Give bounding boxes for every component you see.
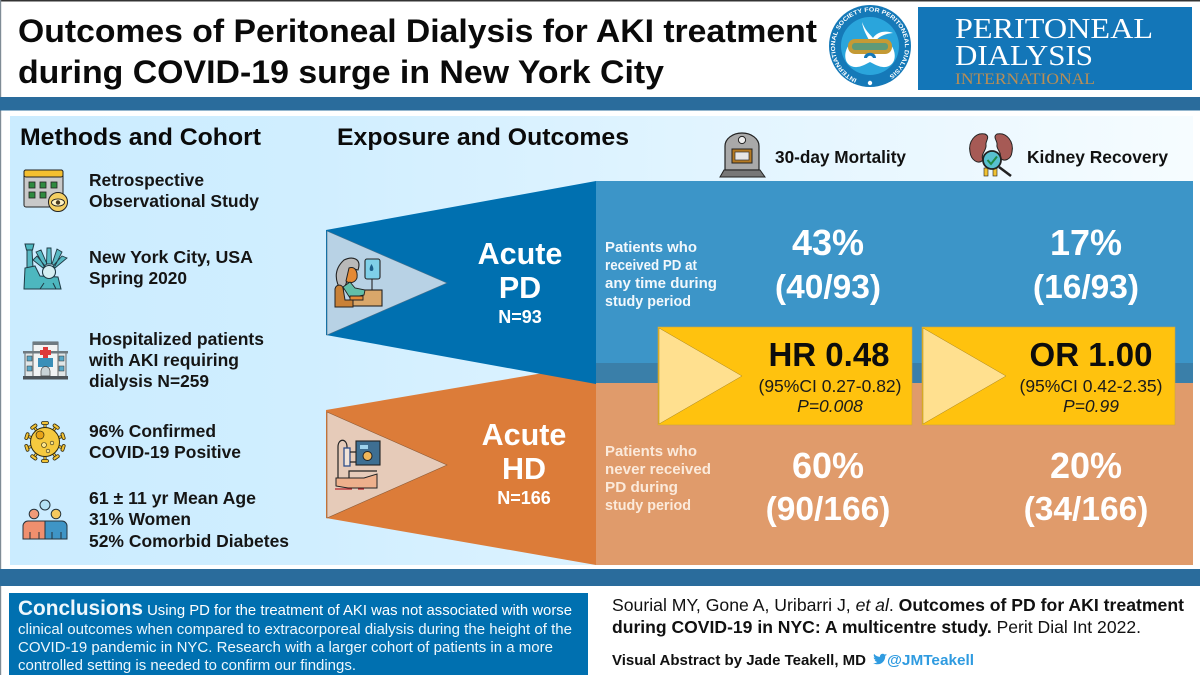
callout: hazard ratio: HR 0.48 [768, 336, 890, 373]
text: demographics: 31% Women [89, 509, 191, 529]
stat: PD mortality: 43% [792, 222, 864, 263]
text: covid status: COVID-19 Positive [89, 442, 241, 462]
callout: hazard ratio: (95%CI 0.27-0.82) [758, 376, 902, 396]
text: study design [89, 170, 259, 211]
text: acute HD label: N=166 [497, 488, 551, 508]
text: PD group definition: Patients who [605, 239, 697, 256]
credit: visual abstract author [612, 652, 974, 669]
text: acute PD label: PD [499, 271, 541, 305]
callout: hazard ratio: P=0.008 [797, 396, 863, 416]
text: location and dates: New York City, USA [89, 247, 253, 267]
stat: PD mortality [775, 222, 881, 306]
panel: methods and cohort [20, 124, 289, 551]
logo: Peritoneal Dialysis International journal [918, 7, 1192, 90]
icon: coronavirus [24, 422, 66, 462]
stat: PD kidney recovery: (16/93) [1033, 269, 1139, 306]
triangle: acute PD [327, 231, 447, 335]
text: acute PD label: N=93 [498, 307, 542, 327]
text: HD group definition [605, 443, 711, 514]
acute PD arm [327, 222, 1139, 335]
text: location and dates: Spring 2020 [89, 268, 187, 288]
icon: people group [23, 500, 67, 539]
triangle: acute HD [327, 412, 447, 518]
text: covid status [89, 421, 241, 462]
stat: HD kidney recovery [1024, 445, 1148, 528]
label: 30-day mortality: 30-day Mortality [775, 147, 906, 167]
panel: acute PD funnel [326, 181, 596, 384]
panel: conclusions [9, 593, 588, 675]
acute HD arm [327, 412, 1148, 528]
stat: HD mortality: (90/166) [766, 491, 890, 528]
text: HD group definition: PD during [605, 479, 678, 496]
title: Outcomes of Peritoneal Dialysis for AKI treatment [18, 13, 817, 49]
panel: conclusions: controlled setting is needed to confirm our findings. [18, 657, 356, 674]
citation: during COVID-19 in NYC: A multicentre study. Perit Dial Int 2022. [612, 617, 1141, 637]
text: patient population: Hospitalized patients [89, 329, 264, 349]
text: PD group definition [605, 239, 717, 310]
text: HD group definition: never received [605, 461, 711, 478]
text: covid status: 96% Confirmed [89, 421, 216, 441]
text: demographics [89, 488, 289, 551]
icon: hemodialysis machine [335, 440, 380, 489]
icon: calendar with eye [24, 170, 68, 212]
panel: conclusions: COVID-19 pandemic in NYC. Research with a larger cohort of patients in a more [18, 639, 553, 656]
text: location and dates [89, 247, 253, 288]
citation: Sourial MY, Gone A, Uribarri J, et al. Outcomes of PD for AKI treatment [612, 595, 1184, 615]
stat: HD kidney recovery: (34/166) [1024, 491, 1148, 528]
stat: HD mortality [766, 445, 890, 528]
callout: odds ratio [922, 327, 1175, 425]
text: PD group definition: any time during [605, 275, 717, 292]
panel: acute HD funnel [326, 364, 596, 565]
stat: PD kidney recovery: 17% [1050, 222, 1122, 263]
callout: odds ratio: (95%CI 0.42-2.35) [1020, 376, 1162, 396]
text: acute PD label [478, 237, 562, 327]
title: during COVID-19 surge in New York City [18, 54, 664, 90]
callout: hazard ratio [658, 327, 912, 425]
icon: hospital [23, 342, 68, 380]
stat: HD mortality: 60% [792, 445, 864, 486]
text: acute HD label [482, 418, 566, 508]
logo: Peritoneal Dialysis International journal: PERITONEAL [955, 13, 1153, 45]
panel: acute HD outcomes [596, 383, 1193, 565]
text: patient population [88, 329, 264, 391]
stat: PD kidney recovery [1033, 222, 1139, 306]
icon: statue of liberty [24, 244, 67, 289]
text: acute PD label: Acute [478, 237, 562, 271]
text: HD group definition: Patients who [605, 443, 697, 460]
icon: tombstone [720, 133, 765, 177]
icon: twitter bird [873, 654, 887, 664]
label: kidney recovery: Kidney Recovery [1027, 147, 1168, 167]
text: acute HD label: Acute [482, 418, 566, 452]
icon: kidneys with magnifier [970, 134, 1012, 176]
heading: exposure and outcomes: Exposure and Outcomes [337, 124, 629, 151]
callout: odds ratio: OR 1.00 [1030, 336, 1152, 373]
text: PD group definition: received PD at [605, 257, 697, 274]
panel: conclusions: Conclusions Using PD for the treatment of AKI was not associated with worse [18, 597, 572, 620]
text: acute HD label: HD [502, 452, 546, 486]
callout: odds ratio: P=0.99 [1063, 396, 1119, 416]
citation [612, 595, 1184, 637]
heading: methods and cohort: Methods and Cohort [20, 124, 261, 151]
panel: conclusions: clinical outcomes when compared to extracorporeal dialysis during the height of the [18, 621, 572, 638]
text: demographics: 52% Comorbid Diabetes [89, 531, 289, 551]
text: PD group definition: study period [605, 293, 691, 310]
credit: visual abstract author: Visual Abstract by Jade Teakell, MD [612, 653, 866, 669]
stat: HD kidney recovery: 20% [1050, 445, 1122, 486]
text: patient population: dialysis N=259 [89, 371, 209, 391]
text: HD group definition: study period [605, 497, 691, 514]
text: study design: Retrospective [89, 170, 204, 190]
panel: main background [10, 116, 1193, 565]
logo: Peritoneal Dialysis International journal: DIALYSIS [955, 40, 1093, 72]
text: study design: Observational Study [89, 191, 259, 211]
panel: acute PD outcomes [596, 181, 1193, 363]
logo: International Society for Peritoneal Dialysis: INTERNATIONAL SOCIETY FOR PERITONEAL DIALYSIS [830, 7, 910, 83]
title [18, 13, 817, 90]
stat: PD mortality: (40/93) [775, 269, 881, 306]
credit: visual abstract author: @JMTeakell [887, 652, 974, 669]
text: demographics: 61 ± 11 yr Mean Age [89, 488, 256, 508]
text: patient population: with AKI requiring [88, 350, 239, 370]
logo: Peritoneal Dialysis International journal: INTERNATIONAL [955, 71, 1095, 88]
icon: patient on peritoneal dialysis [335, 258, 382, 307]
